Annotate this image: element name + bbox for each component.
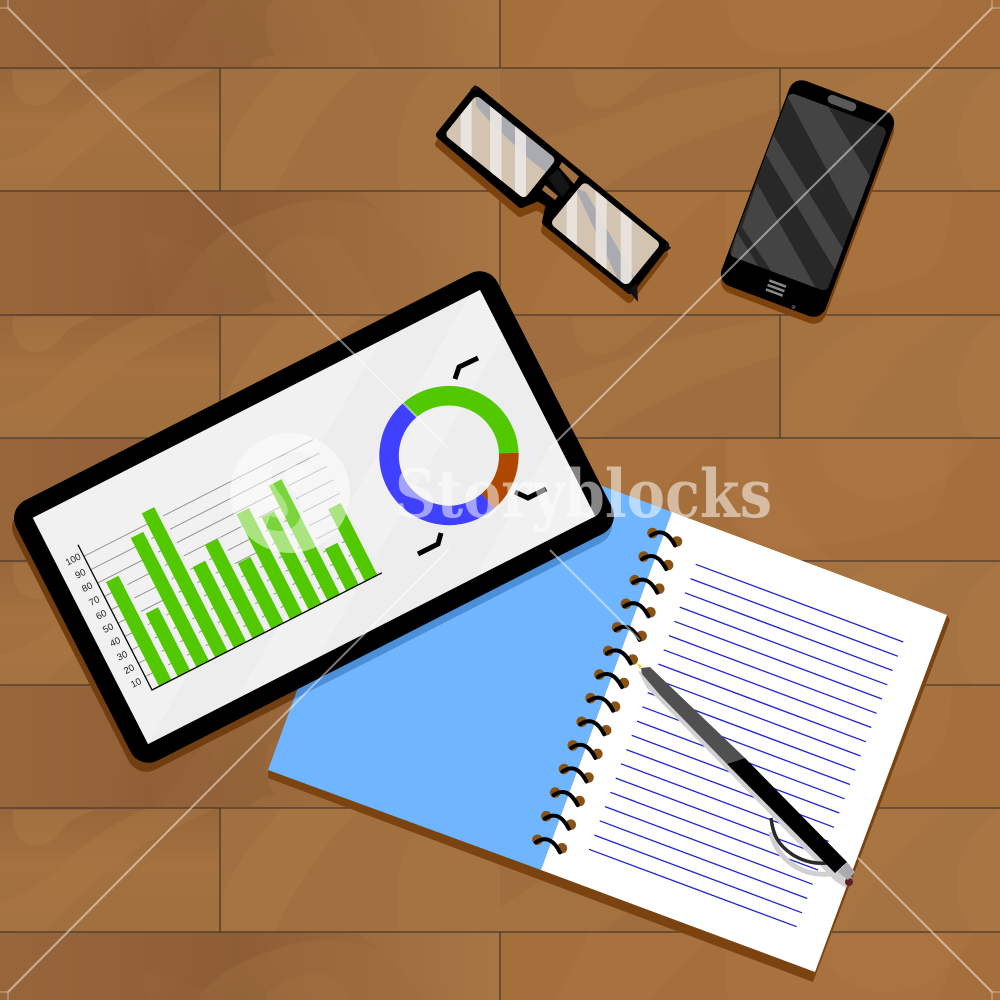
watermark text: Storyblocks	[395, 455, 772, 533]
left lens	[446, 97, 554, 197]
phone body	[717, 76, 898, 321]
axis labels: 50	[101, 621, 116, 636]
axis labels: 100	[64, 552, 83, 569]
pen	[637, 663, 855, 888]
pen shadow	[638, 671, 852, 888]
pen grey barrel	[641, 667, 745, 764]
pen end dot	[845, 878, 853, 886]
right lens	[552, 183, 659, 284]
temple tips	[470, 85, 671, 302]
clip shadow	[771, 832, 838, 874]
pen tip	[637, 663, 642, 669]
axis labels: 60	[94, 608, 109, 623]
glasses shadow	[439, 99, 664, 299]
notebook shadow	[268, 615, 950, 982]
bar gaps	[98, 429, 381, 680]
tablet body and screen	[7, 264, 621, 770]
bridge bar	[548, 169, 570, 197]
corner brackets	[418, 358, 546, 554]
axis labels: 90	[73, 567, 88, 582]
ruled lines	[589, 564, 903, 927]
axes	[78, 428, 382, 690]
blue cover	[268, 410, 672, 870]
grid lines	[84, 440, 374, 677]
pen cap	[838, 862, 855, 880]
pen black barrel	[727, 758, 847, 873]
axis labels	[64, 552, 146, 692]
axis labels: 20	[122, 662, 136, 677]
phone screen	[730, 94, 886, 290]
tablet shadow on notebook	[294, 524, 612, 700]
axis labels: 40	[108, 635, 123, 650]
axis labels: 80	[80, 580, 95, 595]
bar chart	[61, 428, 382, 699]
spiral rings	[532, 528, 682, 854]
axis labels: 30	[115, 649, 130, 664]
glasses	[439, 85, 671, 302]
phone shadow	[717, 83, 898, 328]
watermark logo	[230, 433, 350, 553]
axis labels: 70	[87, 594, 102, 609]
tablet	[5, 264, 621, 779]
tablet shadow on table	[5, 273, 619, 779]
white page	[541, 512, 947, 972]
bridge gaps	[542, 162, 579, 200]
glasses frame	[440, 90, 665, 290]
phone home icon	[765, 279, 787, 297]
phone speaker	[826, 94, 858, 112]
notebook	[268, 410, 950, 982]
smartphone	[717, 76, 898, 328]
donut chart	[389, 396, 509, 515]
axis labels: 10	[129, 676, 144, 691]
bars	[86, 431, 377, 686]
phone camera dot	[792, 305, 796, 309]
pen clip	[771, 818, 828, 863]
